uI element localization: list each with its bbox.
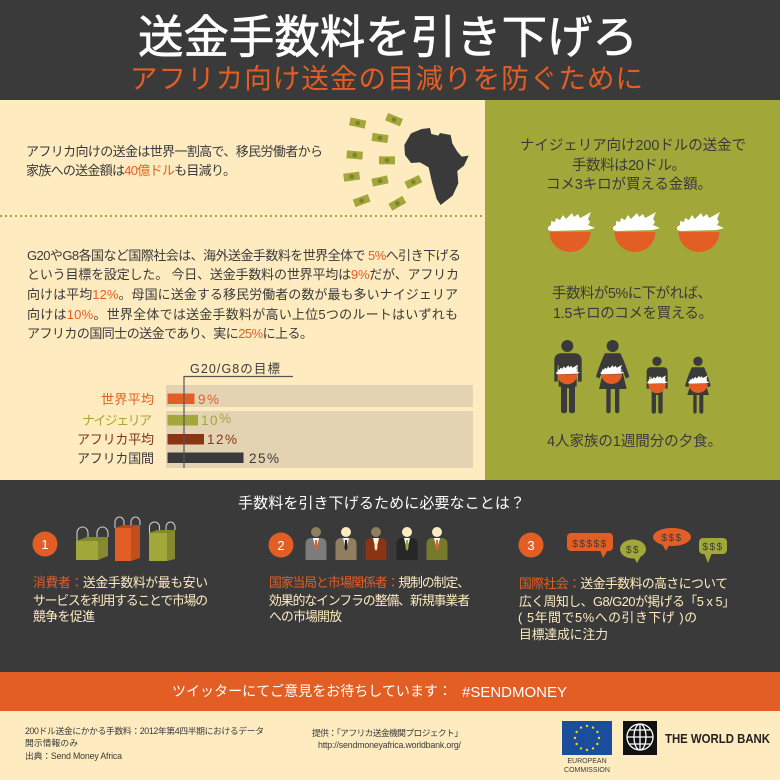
text: at 5 percent: 1.5キロのコメを買える。 bbox=[553, 305, 713, 322]
bar: world average 9%: 世界平均 bbox=[101, 392, 154, 407]
main paragraph: G20やG8各国など国際社会は、海外送金手数料を世界全体で 5%へ引き下げる bbox=[27, 248, 461, 263]
text: international community: 国際社会：送金手数料の高さについて bbox=[519, 576, 728, 591]
text: consumers: 競争を促進 bbox=[33, 609, 95, 624]
main paragraph: という目標を設定した。 今日、送金手数料の世界平均は9%だが、アフリカ bbox=[27, 267, 459, 282]
logo: European Commission: EUROPEAN bbox=[567, 758, 607, 765]
icon: speech bubbles with dollars: $$$$$ bbox=[572, 539, 608, 550]
bar: world average 9% bbox=[101, 392, 221, 407]
item 1: consumers bbox=[32, 517, 208, 624]
icon: money flowing to Africa bbox=[343, 113, 469, 211]
number badge 2: 2 bbox=[277, 538, 285, 553]
text: international community: 広く周知し、G8/G20が掲げる「5 x 5」 bbox=[519, 594, 735, 609]
bar: intra-Africa 25% bbox=[77, 451, 281, 466]
bar: world average 9%: 9% bbox=[198, 392, 221, 407]
bar: Africa average 12%: アフリカ平均 bbox=[77, 432, 154, 447]
number badge 1: 1 bbox=[41, 537, 49, 552]
icon: five officials bbox=[306, 527, 448, 560]
bar: Nigeria 10%: % bbox=[219, 411, 233, 426]
target marker: G20/G8の目標 bbox=[190, 362, 280, 376]
bar: Africa average 12%: 12% bbox=[207, 432, 239, 447]
text: international community: ( 5年間で5%への引き下げ )の bbox=[518, 610, 697, 625]
item 2: authorities bbox=[268, 527, 470, 624]
icon: speech bubbles with dollars bbox=[567, 528, 727, 563]
title: 送金手数料を引き下げろ bbox=[138, 12, 638, 63]
icon: speech bubbles with dollars: $$$ bbox=[702, 542, 724, 553]
text: Nigeria remittance: 手数料は20ドル。 bbox=[572, 157, 686, 174]
text: authorities: 国家当局と市場関係者：規制の制定、 bbox=[269, 575, 470, 590]
source credit bbox=[312, 727, 463, 750]
icon: shopping bags bbox=[76, 517, 175, 561]
text: Nigeria remittance: ナイジェリア向け200ドルの送金で bbox=[520, 137, 746, 154]
panel: what is needed bbox=[0, 480, 780, 672]
text: international community: 目標達成に注力 bbox=[519, 627, 608, 642]
number badge 2 bbox=[268, 532, 294, 558]
text: international community bbox=[518, 576, 735, 642]
number badge 1 bbox=[32, 532, 58, 556]
text: consumers: 消費者：送金手数料が最も安い bbox=[33, 575, 208, 590]
icon: speech bubbles with dollars: $$$ bbox=[661, 533, 683, 544]
footer bbox=[0, 711, 780, 780]
bar: Africa average 12% bbox=[77, 432, 239, 447]
logo: European Commission bbox=[562, 721, 612, 774]
source credit: 提供：「アフリカ送金機関プロジェクト」 bbox=[312, 727, 463, 738]
text: family dinner: 4人家族の1週間分の夕食。 bbox=[547, 433, 722, 450]
source credit: http://sendmoneyafrica.worldbank.org/ bbox=[318, 740, 462, 750]
text: authorities: 効果的なインフラの整備、新規事業者 bbox=[269, 593, 470, 608]
footnotes: 200ドル送金にかかる手数料：2012年第4四半期におけるデータ bbox=[25, 725, 264, 736]
banner: twitter call to action bbox=[0, 672, 780, 711]
item 3: international community bbox=[518, 528, 735, 642]
text: consumers: サービスを利用することで市場の bbox=[33, 593, 208, 608]
bar: Nigeria 10%: 10 bbox=[201, 413, 219, 428]
section heading: 手数料を引き下げるために必要なことは？ bbox=[238, 495, 525, 512]
intro text bbox=[26, 144, 323, 178]
main paragraph: アフリカの国同士の送金であり、実に25%に上る。 bbox=[27, 326, 313, 341]
footnotes: 出典：Send Money Africa bbox=[25, 750, 122, 761]
bar chart bbox=[77, 362, 473, 468]
logo: European Commission: COMMISSION bbox=[564, 767, 610, 774]
bar: intra-Africa 25%: アフリカ国間 bbox=[77, 451, 154, 466]
number badge 3: 3 bbox=[527, 538, 535, 553]
bar: Nigeria 10% bbox=[82, 411, 233, 428]
footnotes bbox=[25, 725, 264, 761]
logo: World Bank bbox=[623, 721, 771, 755]
text: Nigeria remittance: コメ3キロが買える金額。 bbox=[546, 176, 712, 193]
panel: left cream bbox=[0, 100, 485, 480]
icon: family of four with rice bowls bbox=[554, 340, 711, 414]
main paragraph: 向けは10%。世界全体では送金手数料が高い上位5つのルートはいずれも bbox=[27, 307, 458, 322]
text: authorities: への市場開放 bbox=[269, 609, 342, 624]
text: at 5 percent bbox=[552, 285, 713, 322]
number badge 3 bbox=[518, 532, 544, 558]
main paragraph bbox=[27, 248, 461, 341]
banner: twitter call to action: ツイッターにてご意見をお待ちしています： bbox=[172, 683, 452, 699]
text: at 5 percent: 手数料が5%に下がれば、 bbox=[552, 285, 712, 302]
footnotes: 開示情報のみ bbox=[25, 737, 78, 748]
text: consumers bbox=[33, 575, 208, 624]
banner: twitter call to action: #SENDMONEY bbox=[462, 684, 567, 701]
bar: intra-Africa 25%: 25% bbox=[249, 451, 281, 466]
subtitle: アフリカ向け送金の目減りを防ぐために bbox=[130, 63, 643, 94]
main paragraph: 向けは平均12%。母国に送金する移民労働者の数が最も多いナイジェリア bbox=[27, 287, 458, 302]
panel: right olive bbox=[485, 100, 780, 480]
icon: speech bubbles with dollars: $$ bbox=[626, 545, 640, 556]
bar: Nigeria 10%: ナイジェリア bbox=[82, 413, 152, 428]
text: Nigeria remittance bbox=[520, 137, 746, 193]
target marker bbox=[184, 362, 293, 468]
icon: three rice bowls bbox=[548, 212, 724, 252]
intro text: アフリカ向けの送金は世界一割高で、移民労働者から bbox=[26, 144, 323, 159]
intro text: 家族への送金額は40億ドルも目減り。 bbox=[26, 163, 236, 178]
text: authorities bbox=[269, 575, 470, 624]
header: title band bbox=[0, 0, 780, 100]
